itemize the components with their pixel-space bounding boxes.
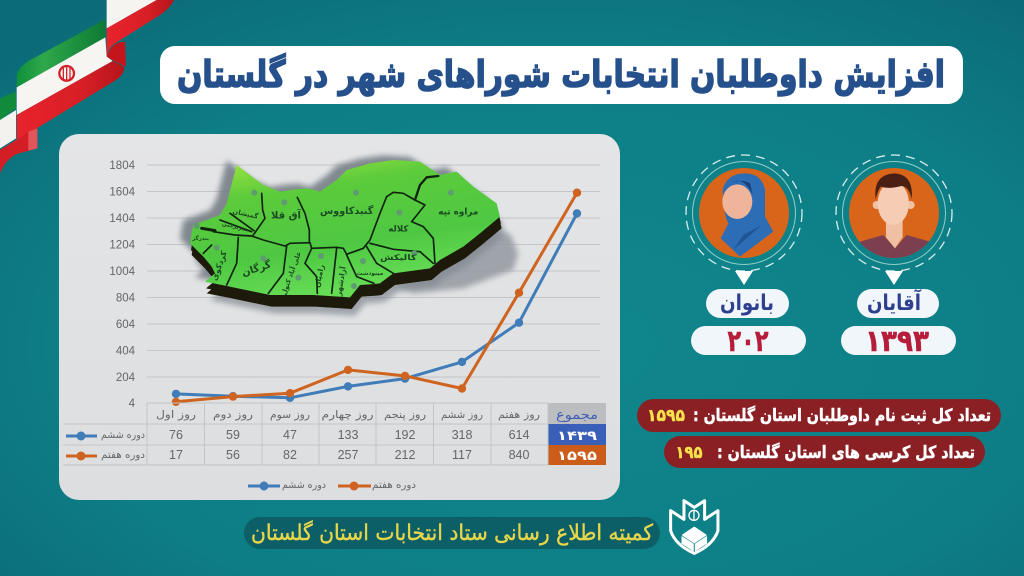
chart y axis labels and grid [109,160,600,410]
line chart series [172,188,581,406]
label: men: آقایان [867,288,921,316]
chart legend [248,480,416,491]
callout: total seats: تعداد کل کرسی های استان گلستان : [717,442,975,463]
table header: روز چهارم [322,409,374,421]
map district names: گمیشان [232,206,259,221]
icon: man avatar [836,155,952,271]
map location pins [194,190,454,289]
label: men [857,288,939,318]
table row: dore sheshom: دوره ششم [101,430,145,441]
chart legend: دوره ششم [282,480,326,491]
table row: dore sheshom: 59 [226,428,240,442]
table row: dore haftom: 117 [452,448,472,462]
map district names: گنبدکاووس [320,204,373,217]
panel: chart [59,134,620,500]
map district names: مینودشت [357,271,384,277]
chart y axis labels and grid: 404 [116,346,136,358]
table row: dore sheshom: 614 [509,428,529,442]
footer: committee name: کمیته اطلاع رسانی ستاد انتخابات استان گلستان [251,520,653,546]
title [160,46,963,104]
callout: total candidates [637,399,1001,432]
icon: woman avatar [686,155,802,271]
map district names: گرگان [240,257,273,279]
map district names: رامیان [312,264,326,288]
map district names: علی آباد کتول [279,250,303,296]
table row: dore sheshom: 133 [338,428,358,442]
table header: مجموع [556,408,598,423]
label: women [706,289,789,318]
chart y axis labels and grid: 1204 [109,240,136,252]
table row: dore sheshom: 192 [395,428,415,442]
chart y axis labels and grid: 604 [116,319,136,331]
table row: dore haftom: 840 [509,448,529,462]
map district names: آزادشهر [333,265,348,298]
chart y axis labels and grid: 1604 [109,186,136,198]
label: women: بانوان [720,291,774,316]
callout: total seats: ۱۹۵ [676,443,702,463]
map district borders [202,176,438,293]
table header [156,408,598,423]
number: women [691,324,806,359]
table row: dore sheshom: 47 [283,428,297,442]
map district names: کلاله [388,225,409,235]
number: women: ۲۰۲ [728,324,768,359]
number: men: ۱۳۹۳ [865,324,929,359]
table row: dore haftom: دوره هفتم [101,450,145,461]
number: men [841,324,956,359]
chart legend: دوره هفتم [372,480,416,491]
callout: total seats [664,436,985,468]
table header: روز هفتم [498,409,540,421]
table row: dore sheshom: 318 [452,428,472,442]
table row: dore haftom: 212 [395,448,415,462]
arrow: woman [735,271,753,285]
map district names: آق قلا [271,209,302,222]
table row: dore sheshom: ۱۴۳۹ [557,429,597,444]
callout: total candidates: ۱۵۹۵ [647,406,685,426]
chart y axis labels and grid: 1004 [109,266,136,278]
table row: dore haftom: 257 [338,448,358,462]
chart y axis labels and grid: 804 [116,292,136,304]
table header: روز سوم [270,409,310,421]
table row: dore sheshom [66,428,597,444]
map: Golestan province [180,155,518,316]
data table [63,403,606,465]
table row: dore haftom: 17 [169,448,183,462]
icon: election headquarters emblem [671,501,718,553]
table row: dore haftom: 82 [283,448,297,462]
series: dore sheshom [172,209,581,402]
table row: dore haftom [66,448,597,464]
map district names: بندرگز [191,235,209,242]
chart y axis labels and grid: 4 [129,398,136,410]
arrow: man [885,271,903,285]
chart y axis labels and grid: 1804 [109,160,136,172]
map district names: کردکوی [210,250,229,282]
table header: روز اول [156,409,196,421]
series: dore haftom [172,188,581,406]
table header: روز پنجم [384,409,426,421]
icon: Iranian flag ribbon [0,0,174,173]
table row: dore haftom: ۱۵۹۵ [557,449,597,464]
map district names: کالیکش [380,253,417,263]
chart y axis labels and grid: 1404 [109,213,136,225]
map district names: مراوه تپه [438,206,479,217]
chart y axis labels and grid: 204 [116,372,136,384]
table row: dore sheshom: 76 [169,428,183,442]
table header: روز دوم [213,409,253,421]
table header: روز ششم [441,409,483,421]
table row: dore haftom: 56 [226,448,240,462]
map district names: بندرترکمن [221,220,249,234]
map district names [191,204,479,298]
